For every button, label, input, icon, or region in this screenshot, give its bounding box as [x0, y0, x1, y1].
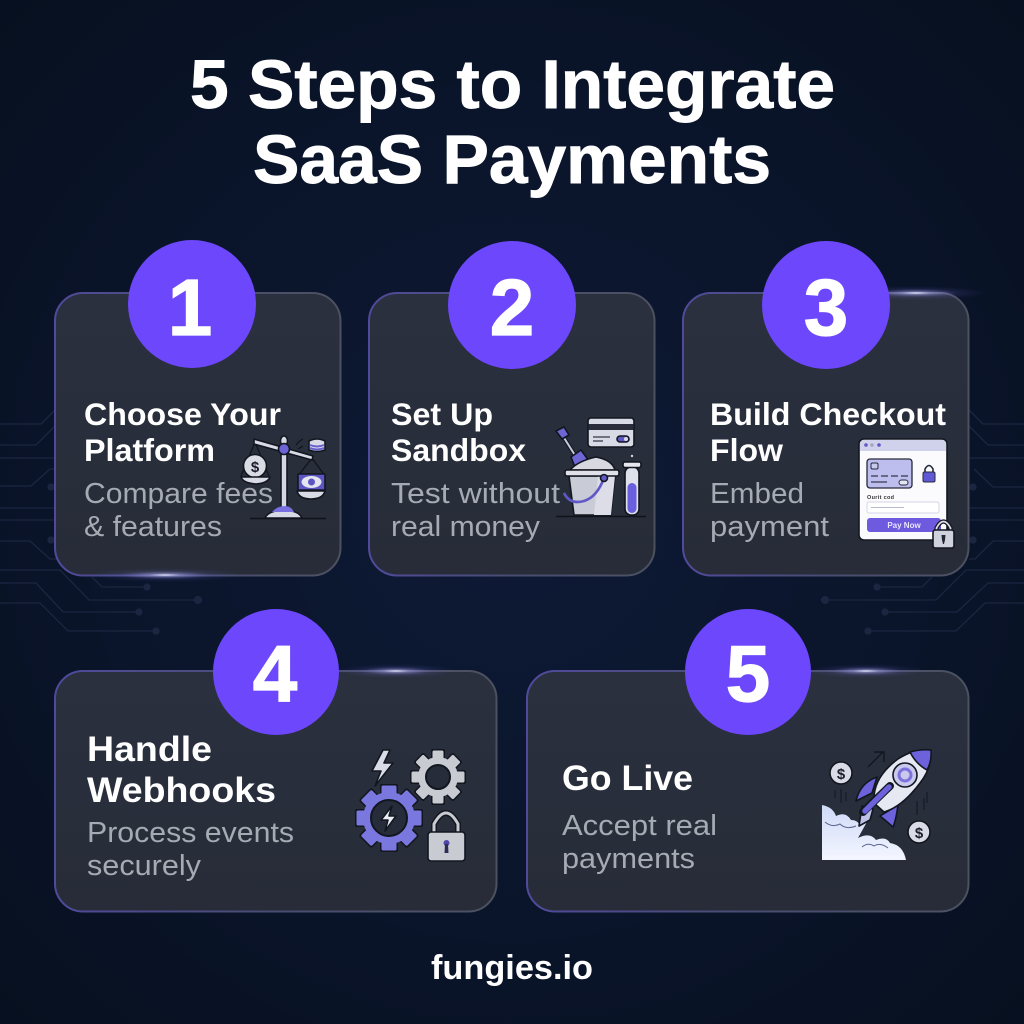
number badge 5: 5	[726, 629, 770, 718]
heading: step 1: Choose Your	[84, 396, 281, 432]
number badge 3: 3	[804, 263, 848, 352]
left circuit lines	[0, 410, 202, 634]
title: 5 Steps to Integrate	[190, 46, 835, 123]
title	[190, 46, 835, 198]
glow: step 3	[846, 286, 986, 300]
heading: step 4	[87, 730, 276, 810]
heading: step 2: Set Up	[391, 396, 493, 432]
description: step 3: Embed	[710, 478, 804, 510]
panel: step 3	[683, 241, 986, 576]
description: step 4: securely	[87, 850, 202, 882]
title: SaaS Payments	[253, 121, 771, 198]
heading: step 3	[710, 396, 947, 468]
description: step 2: real money	[391, 511, 541, 543]
description: step 1: Compare fees	[84, 478, 273, 510]
description: step 1: & features	[84, 511, 222, 543]
description: step 1	[84, 478, 273, 543]
description: step 2	[391, 478, 560, 543]
heading: step 2	[391, 396, 526, 468]
footer brand: fungies.io	[431, 949, 593, 987]
number badge 2: 2	[490, 263, 534, 352]
glow: step 5	[806, 664, 926, 678]
icon: balance scale: $	[251, 459, 260, 476]
heading: step 4: Handle	[87, 730, 212, 769]
description: step 5: payments	[562, 843, 695, 875]
heading: step 3: Flow	[710, 432, 783, 468]
panel: step 1	[55, 240, 340, 582]
icon: rocket launch: $	[915, 825, 924, 842]
number badge 3	[762, 241, 890, 369]
heading: step 1: Platform	[84, 432, 215, 468]
number badge 2	[448, 241, 576, 369]
glow: step 4	[336, 664, 456, 678]
description: step 5	[562, 810, 717, 875]
description: step 5: Accept real	[562, 810, 717, 842]
icon: checkout window: Pay Now	[887, 521, 921, 530]
grey gear	[410, 749, 466, 805]
glow: step 1	[89, 568, 241, 582]
number badge 1: 1	[168, 263, 212, 352]
number badge 1	[128, 240, 256, 368]
description: step 2: Test without	[391, 478, 560, 510]
heading: step 3: Build Checkout	[710, 396, 947, 432]
heading: step 5: Go Live	[562, 759, 693, 798]
icon: balance scale	[241, 436, 326, 518]
purple gear	[355, 784, 423, 852]
icon: rocket launch: $	[837, 766, 846, 783]
icon: checkout window: Ourit cod	[867, 495, 894, 501]
number badge 4	[213, 609, 339, 735]
heading: step 4: Webhooks	[87, 771, 276, 810]
heading: step 1	[84, 396, 281, 468]
panel: step 5	[527, 609, 968, 912]
description: step 3: payment	[710, 511, 829, 543]
icon: rocket launch	[822, 750, 931, 860]
icon: checkout window	[859, 439, 954, 548]
right circuit lines	[822, 410, 1024, 634]
description: step 3	[710, 478, 829, 543]
description: step 4	[87, 817, 294, 882]
number badge 4: 4	[253, 629, 298, 718]
panel: step 4	[55, 609, 496, 912]
number badge 5	[685, 609, 811, 735]
icon: sandbox bucket	[556, 418, 646, 516]
description: step 4: Process events	[87, 817, 294, 849]
panel: step 2	[369, 241, 654, 576]
heading: step 2: Sandbox	[391, 432, 526, 468]
icon: gears and lock	[355, 749, 466, 861]
